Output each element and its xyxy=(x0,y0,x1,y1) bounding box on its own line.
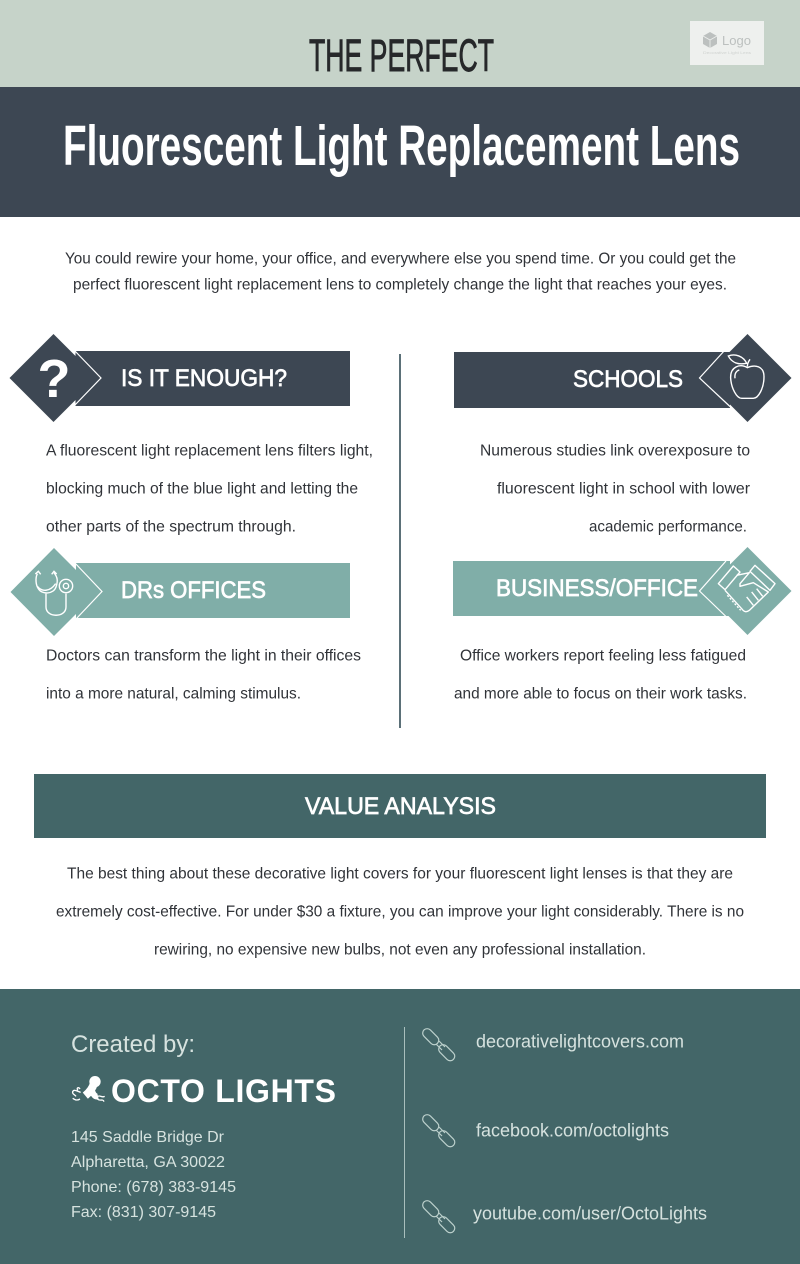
title banner xyxy=(0,87,800,217)
heading bar: drs offices: DRs OFFICES xyxy=(121,577,266,604)
icon: question mark diamond xyxy=(10,334,101,422)
body text: business office: and more able to focus on their work tasks. xyxy=(454,686,747,702)
heading bar: drs offices xyxy=(76,563,350,618)
panel: schools xyxy=(454,334,792,536)
heading bar: is it enough xyxy=(76,351,350,406)
icon: link 2 xyxy=(421,1113,457,1149)
link text 1: decorativelightcovers.com xyxy=(476,1032,684,1052)
body text: drs offices: Doctors can transform the light in their offices xyxy=(46,648,361,664)
icon: apple diamond xyxy=(700,334,792,422)
icon: stethoscope diamond xyxy=(10,548,102,636)
body text: is it enough xyxy=(46,442,373,536)
icon: link 1 xyxy=(421,1027,457,1063)
value analysis heading: VALUE ANALYSIS xyxy=(305,793,496,820)
created by: Created by: xyxy=(71,1031,195,1058)
logo placeholder: Decorative Light Lens xyxy=(703,50,751,55)
value analysis text xyxy=(56,866,744,958)
logo placeholder: Logo xyxy=(722,33,751,48)
link text 3: youtube.com/user/OctoLights xyxy=(473,1204,707,1224)
body text: schools: Numerous studies link overexposure to xyxy=(480,442,750,460)
heading bar: schools: SCHOOLS xyxy=(573,366,683,393)
value analysis text: rewiring, no expensive new bulbs, not even any professional installation. xyxy=(154,942,646,958)
body text: drs offices xyxy=(46,648,361,702)
footer divider xyxy=(404,1027,405,1238)
panel: business office xyxy=(453,547,792,702)
octo lights logo: OCTO LIGHTS xyxy=(111,1073,336,1109)
body text: business office xyxy=(454,648,747,702)
intro text: You could rewire your home, your office, and everywhere else you spend time. Or you could get the xyxy=(65,250,736,268)
heading bar: business office: BUSINESS/OFFICE xyxy=(496,575,698,602)
footer xyxy=(0,989,800,1264)
body text: business office: Office workers report feeling less fatigued xyxy=(460,648,746,664)
link text 2: facebook.com/octolights xyxy=(476,1120,669,1140)
panel: is it enough xyxy=(10,334,373,536)
address: Fax: (831) 307-9145 xyxy=(71,1204,216,1221)
body text: is it enough: A fluorescent light replacement lens filters light, xyxy=(46,442,373,460)
icon: handshake diamond xyxy=(700,547,792,635)
logo placeholder xyxy=(690,21,764,65)
panel: drs offices xyxy=(10,548,361,702)
address: Phone: (678) 383-9145 xyxy=(71,1179,236,1196)
intro text: perfect fluorescent light replacement lens to completely change the light that reaches your eyes. xyxy=(73,276,727,294)
address xyxy=(71,1129,236,1221)
icon: question mark diamond: ? xyxy=(38,349,70,409)
header band xyxy=(0,0,800,87)
address: 145 Saddle Bridge Dr xyxy=(71,1129,225,1146)
icon: link 3 xyxy=(421,1199,457,1235)
body text: schools xyxy=(480,442,751,536)
icon: octopus xyxy=(73,1076,105,1102)
heading bar: business office xyxy=(453,561,730,616)
body text: schools: fluorescent light in school with lower xyxy=(497,480,751,498)
center divider xyxy=(399,354,401,728)
body text: is it enough: blocking much of the blue light and letting the xyxy=(46,480,358,498)
title: the perfect: THE PERFECT xyxy=(309,30,494,81)
body text: is it enough: other parts of the spectrum through. xyxy=(46,518,296,536)
value analysis text: The best thing about these decorative light covers for your fluorescent light lenses is that they are xyxy=(67,866,733,882)
value analysis text: extremely cost-effective. For under $30 a fixture, you can improve your light considerably. There is no xyxy=(56,904,744,920)
heading bar: schools xyxy=(454,352,730,408)
body text: schools: academic performance. xyxy=(589,518,747,536)
value analysis heading xyxy=(34,774,766,838)
heading bar: is it enough: IS IT ENOUGH? xyxy=(121,365,287,392)
intro text xyxy=(65,250,736,294)
address: Alpharetta, GA 30022 xyxy=(71,1154,225,1171)
body text: drs offices: into a more natural, calming stimulus. xyxy=(46,686,301,702)
